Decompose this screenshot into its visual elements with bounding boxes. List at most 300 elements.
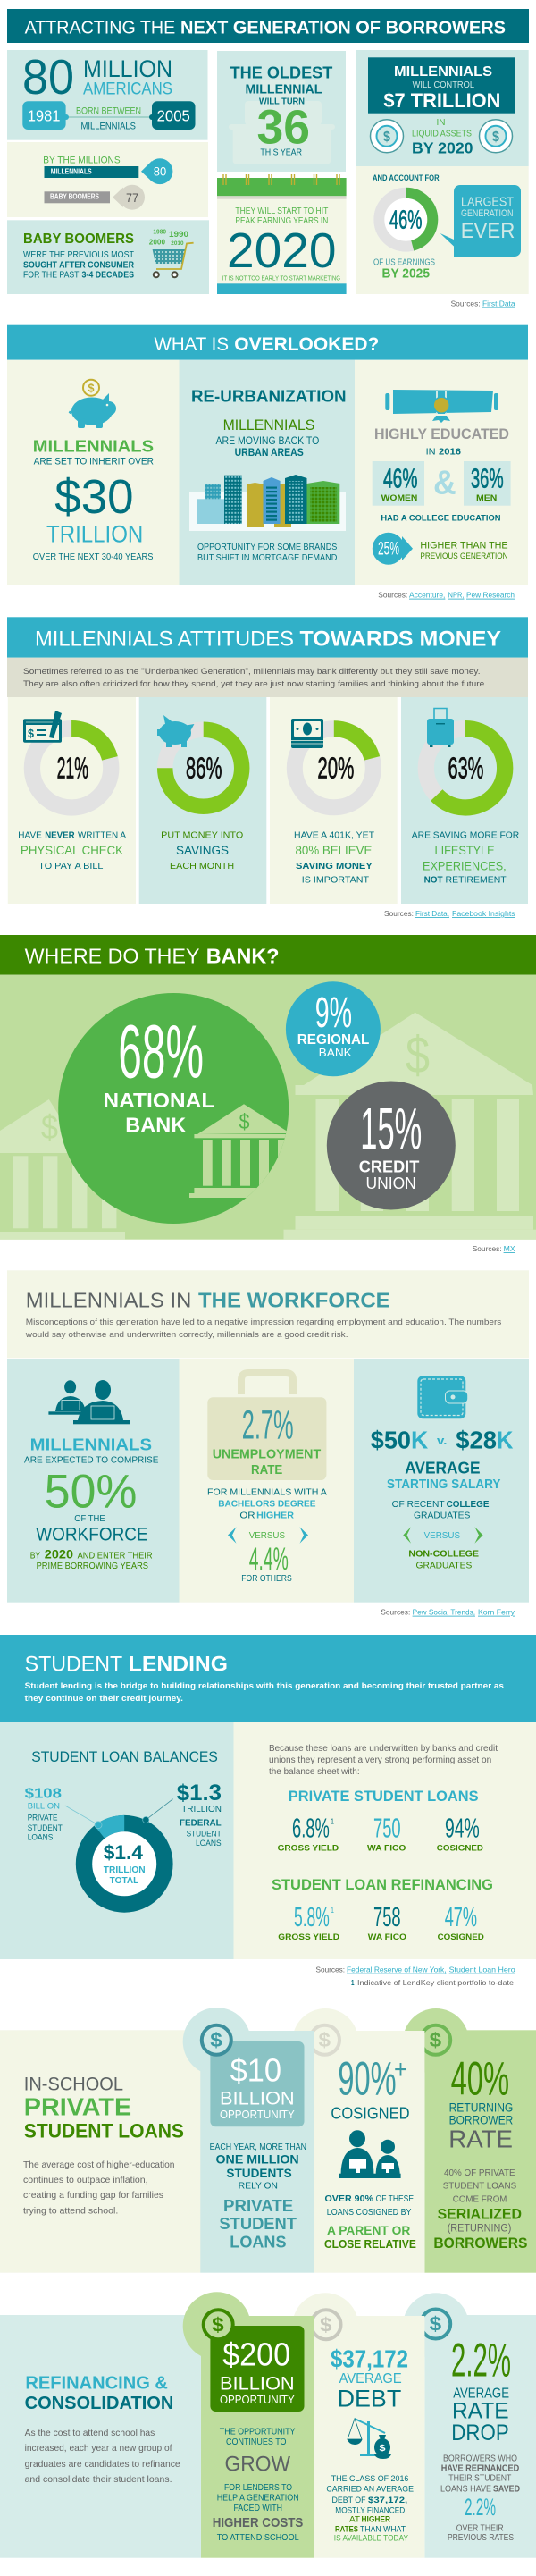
national bank circle (58, 993, 292, 1224)
source line and footnote: federal reserve student loan hero (316, 1966, 515, 1987)
panel: baby boomers: SOUGHT AFTER CONSUMER (23, 259, 134, 270)
panel: inherit $30 trillion: MILLENNIALS (33, 437, 154, 456)
panel: 80 million americans: AMERICANS (83, 80, 172, 98)
panel: $37,172 average debt: HIGHER (361, 2514, 390, 2524)
national bank circle: NATIONAL (103, 1089, 214, 1112)
icon: dollar coin: $ (210, 2029, 222, 2051)
callout box: $10 billion: $10 (230, 2051, 281, 2088)
heading: millennials in the workforce: MILLENNIALS IN (26, 1288, 191, 1311)
stats: private student loans: WA FICO (367, 1844, 406, 1854)
heading: student lending: Student lending is the bridge to building relationships with this generation and becoming their trusted partner as (25, 1681, 504, 1691)
panel: highly educated: HAD A COLLEGE EDUCATION (381, 514, 501, 524)
label: federal student loans: FEDERAL (180, 1818, 222, 1829)
panel: 2.2 percent average rate drop (403, 2293, 536, 2558)
panel: millennials will control $7 trillion: MILLENNIALS (394, 64, 492, 80)
panel: baby boomers: WERE THE PREVIOUS MOST (23, 249, 134, 260)
stats: private student loans: PRIVATE STUDENT LOANS (289, 1788, 479, 1805)
panel: highly educated: HIGHER THAN THE (420, 541, 508, 551)
source line: first data facebook insights: First Data, (415, 909, 449, 918)
panel: where do they bank chart (0, 975, 536, 1240)
stats: private student loans (278, 1788, 483, 1854)
panel: highly educated: HIGHLY EDUCATED (374, 425, 509, 442)
panel: lifestyle 63 percent: EXPERIENCES, (423, 859, 507, 873)
heading: millennials in the workforce: would say otherwise and underwritten correctly, millennials are a good credit risk. (25, 1330, 348, 1340)
label: federal student loans (177, 1780, 222, 1848)
source line: first data: First Data (482, 299, 515, 308)
label: federal student loans: $1.3 (177, 1780, 222, 1806)
panel: 2.7 percent unemployment: RATE (251, 1463, 283, 1477)
source line and footnote: federal reserve student loan hero: Federal Reserve of New York, (347, 1966, 447, 1974)
panel: $37,172 average debt: AT (349, 2514, 360, 2524)
icon: shopping cart with years: 2010 (171, 240, 184, 247)
icon: check and pen: $ (28, 727, 35, 740)
source line and footnote: federal reserve student loan hero: 1 (351, 1978, 355, 1987)
panel: $37,172 average debt: DEBT OF (332, 2496, 366, 2505)
panel: 2.7 percent unemployment: OR (239, 1511, 255, 1521)
panel: lifestyle 63 percent: LIFESTYLE (434, 843, 495, 857)
chart: 86 percent donut (165, 729, 242, 806)
source line and footnote: federal reserve student loan hero: Sources: (316, 1966, 345, 1974)
stats: student loan refinancing: STUDENT LOAN REFINANCING (272, 1876, 493, 1893)
panel: 50 percent of the workforce: WORKFORCE (36, 1525, 148, 1545)
callout: largest generation ever (440, 185, 521, 257)
credit union circle: CREDIT (359, 1158, 419, 1176)
panel: 2.7 percent unemployment: HIGHER (256, 1511, 294, 1521)
panel: highly educated: & (433, 464, 456, 501)
source line and footnote: federal reserve student loan hero: Student Loan Hero (449, 1966, 515, 1974)
label: private student loans: PRIVATE (28, 1814, 57, 1823)
panel: highly educated (355, 360, 528, 585)
panel: the oldest millennial (217, 51, 346, 172)
panel: millennials will control $7 trillion (356, 50, 529, 166)
panel: 401k 20 percent: 80% BELIEVE (295, 843, 372, 857)
chart: 63 percent donut (426, 728, 505, 808)
panel: $37,172 average debt: CARRIED AN AVERAGE (326, 2484, 414, 2494)
panel: 40 percent returning borrower rate: 40% OF PRIVATE (444, 2168, 515, 2178)
panel: refinancing and consolidation intro: CONSOLIDATION (25, 2393, 173, 2413)
callout box: $200 billion (210, 2326, 304, 2412)
panel: by the millions bar chart: 77 (126, 191, 138, 205)
panel: starting salary: K (497, 1427, 513, 1454)
panel: 80 million americans: 80 (22, 49, 74, 105)
panel: 2.2 percent average rate drop: RATE (452, 2398, 509, 2423)
panel: $200 billion opportunity: CONTINUES TO (226, 2437, 287, 2447)
panel: re-urbanization: URBAN AREAS (235, 448, 304, 459)
stats: student loan refinancing: 758 (373, 1901, 401, 1932)
panel: 50 percent of the workforce: ARE EXPECTED TO COMPRISE (24, 1455, 159, 1466)
panel: 50 percent of the workforce: 2020 (45, 1546, 73, 1561)
icon: 25 percent badge (373, 533, 413, 565)
source line: accenture npr pew (378, 591, 515, 600)
icon: scales with money bag: $ (379, 2444, 386, 2454)
icon: dollar coin: $ (212, 2313, 224, 2336)
panel: 2.2 percent average rate drop: HAVE REFINANCED (441, 2463, 519, 2473)
icon: shopping cart with years: 2000 (149, 238, 165, 247)
source line: first data facebook insights: Facebook Insights (452, 909, 515, 918)
icon: coin left (370, 120, 404, 153)
panel: $10 billion opportunity: RELY ON (239, 2181, 278, 2192)
panel: refinancing and consolidation intro: and consolidate their student loans. (25, 2474, 172, 2485)
panel: lifestyle 63 percent: RETIREMENT (445, 875, 507, 886)
panel: performing asset statistics: unions they represent a very strong performing asset on (269, 1755, 491, 1765)
heading: student lending (0, 1635, 536, 1722)
panel: starting salary: K (411, 1427, 428, 1454)
callout box: $10 billion (210, 2041, 304, 2126)
panel: $10 billion opportunity (183, 2008, 314, 2273)
panel: starting salary: NON-COLLEGE (408, 1549, 479, 1560)
regional bank circle: 9% (315, 989, 352, 1037)
panel: inherit $30 trillion: ARE SET TO INHERIT OVER (34, 457, 154, 467)
panel: 46 percent of earnings: OF US EARNINGS (373, 258, 435, 268)
panel: lifestyle 63 percent: NOT (424, 875, 443, 886)
source line: pew korn ferry (381, 1608, 515, 1617)
panel: inherit $30 trillion: $30 (54, 470, 133, 524)
panel: 50 percent of the workforce: AND ENTER THEIR (78, 1550, 153, 1561)
panel: 40 percent returning borrower rate: BORROWERS (433, 2235, 527, 2252)
icon: coin right (479, 120, 513, 153)
icon: versus chevrons (228, 1527, 308, 1544)
icon: check and pen (23, 711, 62, 743)
panel: lifestyle 63 percent: ARE SAVING MORE FOR (412, 830, 520, 841)
icon: piggy bank with coin: $ (88, 381, 95, 395)
panel: $37,172 average debt: RATES (335, 2524, 358, 2534)
panel: the oldest millennial: MILLENNIAL (245, 82, 322, 97)
callout box: $200 billion: BILLION (220, 2373, 295, 2394)
panel: refinancing and consolidation intro: graduates are candidates to refinance (25, 2459, 180, 2470)
panel: performing asset statistics: Because these loans are underwritten by banks and credit (269, 1744, 498, 1754)
panel: 50 percent of the workforce: 50% (45, 1466, 137, 1519)
callout: largest generation ever: LARGEST (461, 195, 514, 210)
panel: the oldest millennial: THIS YEAR (260, 147, 302, 157)
icon: dollar coin: $ (318, 2029, 331, 2051)
stats: private student loans: GROSS YIELD (278, 1844, 339, 1854)
callout box: $200 billion: $200 (222, 2336, 290, 2373)
panel: by the millions bar chart (7, 142, 208, 217)
panel: starting salary: AVERAGE (405, 1460, 481, 1477)
panel: in-school private student loans intro (0, 2030, 200, 2273)
panel: $37,172 average debt: $37,172, (368, 2496, 407, 2505)
panel: refinancing and consolidation intro: As the cost to attend school has (25, 2428, 155, 2438)
panel: re-urbanization: OPPORTUNITY FOR SOME BRANDS (197, 542, 337, 552)
panel: $10 billion opportunity: ONE MILLION (216, 2152, 299, 2167)
panel: 90 percent cosigned: OVER 90% (325, 2194, 373, 2204)
chart: loan balance donut: $1.4 (104, 1841, 143, 1864)
source line: mx: MX (504, 1244, 515, 1253)
panel: re-urbanization: BUT SHIFT IN MORTGAGE DEMAND (197, 552, 338, 563)
panel: 40 percent returning borrower rate: STUDENT LOANS (443, 2181, 517, 2191)
panel: 80 million americans: MILLENNIALS (80, 121, 136, 131)
panel: 50 percent of the workforce (7, 1359, 179, 1603)
panel: highly educated: IN (426, 447, 436, 458)
chart: loan balance donut: TRILLION (104, 1865, 146, 1875)
stats: private student loans: 94% (445, 1813, 480, 1844)
panel: 2.2 percent average rate drop: BORROWERS WHO (443, 2454, 517, 2463)
panel: refinancing and consolidation intro: increased, each year a new group of (25, 2443, 172, 2454)
panel: 50 percent of the workforce: MILLENNIALS (30, 1435, 152, 1453)
heading: student lending: LENDING (129, 1652, 228, 1676)
panel: 2.7 percent unemployment: 4.4% (249, 1542, 289, 1577)
icon: shopping cart with years (149, 230, 194, 277)
panel: 2.7 percent unemployment (179, 1359, 354, 1603)
panel: 2.2 percent average rate drop: THEIR STUDENT (448, 2474, 511, 2484)
title: attracting the next generation: ATTRACTING THE (25, 18, 175, 38)
panel: $200 billion opportunity: THE OPPORTUNITY (220, 2427, 296, 2437)
panel: $200 billion opportunity: FACED WITH (234, 2504, 282, 2513)
stats: student loan refinancing: COSIGNED (438, 1932, 484, 1942)
panel: student loan balances (0, 1722, 234, 1959)
icon: birthday cake (229, 80, 335, 164)
title: attracting the next generation: NEXT GENERATION OF BORROWERS (180, 18, 506, 38)
panel: 46 percent of earnings: AND ACCOUNT FOR (373, 173, 440, 182)
national bank circle: BANK (125, 1114, 187, 1137)
national bank circle: $ (239, 1110, 250, 1134)
chart: 21 percent donut: 21% (57, 751, 88, 784)
icon: calendar rings (223, 174, 339, 185)
panel: 40 percent returning borrower rate: RATE (448, 2125, 513, 2152)
panel: $10 billion opportunity: STUDENT (219, 2214, 297, 2233)
panel: 80 million americans: 1981 (28, 106, 61, 124)
panel: $37,172 average debt: DEBT (338, 2386, 401, 2412)
stats: private student loans: 6.8% (292, 1813, 330, 1844)
icon: large bank background (284, 1013, 536, 1240)
panel: in-school private student loans intro: STUDENT LOANS (24, 2120, 184, 2142)
icon: briefcase (207, 1373, 326, 1480)
panel: $200 billion opportunity: HELP A GENERATION (217, 2493, 299, 2503)
stats: private student loans: 750 (373, 1813, 401, 1844)
panel: re-urbanization: MILLENNIALS (223, 417, 314, 434)
panel: physical check 21 percent: WRITTEN A (78, 830, 126, 841)
panel: starting salary: v. (437, 1434, 447, 1447)
panel: 2.7 percent unemployment: FOR MILLENNIALS WITH A (207, 1487, 327, 1498)
panel: 40 percent returning borrower rate (403, 2008, 536, 2273)
panel: millennials will control $7 trillion: $7 TRILLION (383, 89, 500, 112)
panel: millennials will control $7 trillion: BY 2020 (412, 139, 473, 157)
panel: 2.2 percent average rate drop: LOANS HAVE (440, 2484, 491, 2494)
source line: first data (451, 299, 515, 308)
panel: 80 million americans: 2005 (157, 106, 190, 124)
panel: 2.2 percent average rate drop: 2.2% (465, 2494, 496, 2521)
stats: private student loans: COSIGNED (437, 1844, 483, 1854)
source line: mx: Sources: (473, 1244, 502, 1253)
label: private student loans: LOANS (28, 1833, 53, 1843)
panel: millennials will control $7 trillion: LIQUID ASSETS (412, 128, 472, 139)
panel: highly educated: WOMEN (381, 493, 418, 503)
stats: student loan refinancing: GROSS YIELD (278, 1932, 339, 1942)
panel: 90 percent cosigned: OF THESE (376, 2194, 414, 2204)
icon: city skyline (189, 475, 346, 531)
panel: inherit $30 trillion (7, 360, 179, 585)
panel: by the millions bar chart: BABY BOOMERS (50, 193, 100, 201)
panel: lifestyle 63 percent (401, 697, 528, 904)
icon: versus chevrons (403, 1527, 483, 1544)
chart: 46 percent donut (373, 188, 438, 252)
panel: inherit $30 trillion: TRILLION (46, 521, 143, 548)
panel: refinancing and consolidation intro (0, 2315, 201, 2558)
callout box: $200 billion: OPPORTUNITY (220, 2394, 295, 2406)
icon: coin left: $ (383, 130, 390, 145)
panel: 40 percent returning borrower rate: (RETURNING) (448, 2224, 512, 2235)
icon: dollar coin (421, 2310, 450, 2338)
panel: millennials will control $7 trillion: IN (436, 118, 445, 128)
panel: 40 percent returning borrower rate: RETURNING (449, 2101, 513, 2115)
panel: starting salary: VERSUS (424, 1531, 460, 1541)
panel: highly educated: 36% (471, 463, 504, 494)
panel: $200 billion opportunity: HIGHER COSTS (213, 2515, 303, 2530)
panel: 401k 20 percent: HAVE A 401K, YET (294, 830, 375, 841)
panel: starting salary (354, 1359, 529, 1603)
icon: dollar coin (310, 2025, 339, 2055)
icon: dollar coin (421, 2025, 450, 2055)
chart: 86 percent donut: 86% (186, 751, 222, 784)
credit union circle (327, 1082, 456, 1210)
heading: student lending: they continue on their credit journey. (25, 1694, 183, 1704)
panel: physical check 21 percent: PHYSICAL CHECK (21, 843, 124, 857)
panel: $37,172 average debt: THE CLASS OF 2016 (331, 2474, 408, 2484)
callout box: $10 billion: OPPORTUNITY (220, 2109, 295, 2121)
source line: accenture npr pew: Sources: (378, 591, 407, 600)
text block: underbanked generation intro: They are also often criticized for how they spend, yet they are just now starting families and thinking about the future. (23, 679, 487, 689)
panel: the oldest millennial: THE OLDEST (230, 63, 333, 81)
callout: largest generation ever: EVER (461, 219, 515, 243)
panel: in-school private student loans intro: IN-SCHOOL (24, 2074, 123, 2094)
panel: $10 billion opportunity: LOANS (230, 2233, 286, 2252)
panel: highly educated: 2016 (439, 447, 461, 458)
panel: baby boomers: 3-4 DECADES (82, 270, 134, 281)
panel: starting salary: $28 (456, 1427, 497, 1454)
panel: by the millions bar chart: MILLENNIALS (51, 168, 92, 176)
label: federal student loans: LOANS (196, 1839, 222, 1848)
icon: dollar coin (202, 2025, 231, 2055)
chart: loan balance donut: TOTAL (110, 1876, 138, 1886)
panel: in-school private student loans intro: trying to attend school. (23, 2206, 118, 2217)
chart: 21 percent donut (32, 728, 111, 808)
panel: starting salary: COLLEGE (447, 1499, 490, 1510)
panel: 90 percent cosigned: 90% (338, 2052, 397, 2105)
credit union circle: 15% (360, 1096, 422, 1162)
panel: starting salary: GRADUATES (416, 1561, 472, 1571)
callout box: $10 billion: BILLION (220, 2088, 295, 2109)
label: federal student loans: STUDENT (187, 1829, 222, 1839)
heading: millennials in the workforce: THE WORKFORCE (198, 1288, 390, 1311)
source line: accenture npr pew: Pew Research (466, 591, 515, 600)
chart: 46 percent donut: 46% (389, 206, 422, 235)
icon: coin right: $ (492, 130, 499, 145)
panel: refinancing and consolidation intro: REFINANCING & (25, 2373, 168, 2394)
source line: accenture npr pew: Accenture, (409, 591, 445, 600)
panel: 401k 20 percent (270, 697, 398, 904)
panel: in-school private student loans intro: The average cost of higher-education (23, 2159, 175, 2170)
panel: 2.7 percent unemployment: VERSUS (249, 1531, 285, 1541)
panel: 46 percent of earnings: BY 2025 (382, 267, 430, 282)
panel: $200 billion opportunity: TO ATTEND SCHOOL (217, 2533, 299, 2543)
label: private student loans: $108 (25, 1787, 62, 1802)
title: attracting the next generation (7, 9, 529, 43)
panel: student loan balances: STUDENT LOAN BALANCES (31, 1748, 218, 1765)
chart: 20 percent donut (295, 728, 373, 807)
panel: highly educated: MEN (476, 493, 497, 503)
icon: people at laptops (48, 1380, 130, 1424)
panel: performing asset statistics (234, 1722, 536, 1959)
label: private student loans: STUDENT (28, 1823, 63, 1833)
heading: millennials in the workforce (7, 1270, 529, 1358)
panel: 50 percent of the workforce: OF THE (74, 1514, 105, 1524)
panel: baby boomers: FOR THE PAST (23, 270, 80, 281)
panel: savings 86 percent: EACH MONTH (170, 861, 234, 871)
panel: calendar 2020: PEAK EARNING YEARS IN (235, 215, 328, 226)
panel: starting salary: STARTING SALARY (387, 1477, 500, 1492)
heading: millennials attitudes towards money: TOWARDS MONEY (300, 627, 501, 651)
panel: in-school private student loans intro: continues to outpace inflation, (23, 2175, 148, 2185)
label: private student loans (25, 1787, 63, 1843)
panel: 2.2 percent average rate drop: DROP (451, 2420, 509, 2446)
panel: calendar 2020: 2020 (227, 223, 336, 278)
panel: the oldest millennial: WILL TURN (259, 97, 305, 106)
source line: pew korn ferry: Korn Ferry (478, 1608, 515, 1617)
panel: by the millions bar chart: 80 (154, 165, 166, 179)
icon: dollar coin: $ (430, 2029, 441, 2051)
stats: student loan refinancing: 1 (331, 1907, 334, 1915)
panel: 80 million americans: BORN BETWEEN (76, 106, 141, 117)
panel: 90 percent cosigned: + (394, 2055, 407, 2084)
icon: shopping cart with years: 1990 (169, 230, 188, 240)
panel: calendar 2020 (217, 174, 347, 294)
regional bank circle (286, 981, 381, 1076)
panel: $200 billion opportunity (183, 2292, 314, 2558)
panel: 401k 20 percent: SAVING MONEY (296, 861, 373, 871)
heading: millennials attitudes towards money: MILLENNIALS ATTITUDES (35, 627, 294, 651)
icon: diploma (385, 390, 498, 423)
panel: 2.2 percent average rate drop: SAVED (493, 2484, 520, 2494)
source line: pew korn ferry: Sources: (381, 1608, 410, 1617)
label: private student loans: BILLION (28, 1801, 60, 1811)
source line and footnote: federal reserve student loan hero: Indicative of LendKey client portfolio to-date (357, 1978, 514, 1987)
national bank circle: 68% (118, 1010, 204, 1094)
stats: student loan refinancing: WA FICO (368, 1932, 406, 1942)
panel: in-school private student loans intro: creating a funding gap for families (23, 2190, 163, 2201)
panel: 40 percent returning borrower rate: COME FROM (453, 2194, 507, 2204)
stats: student loan refinancing: 47% (445, 1901, 477, 1932)
panel: 40 percent returning borrower rate: SERIALIZED (438, 2205, 522, 2222)
icon: parent and child at screens (339, 2130, 401, 2178)
panel: savings 86 percent: SAVINGS (176, 843, 229, 857)
heading: where do they bank: WHERE DO THEY (25, 944, 200, 967)
panel: 80 million americans: MILLION (83, 55, 172, 82)
panel: baby boomers: BABY BOOMERS (23, 232, 134, 247)
icon: suitcase (427, 708, 454, 747)
icon: dollar coin: $ (430, 2313, 441, 2336)
icon: small bank background (0, 1099, 125, 1240)
panel: 46 percent of earnings (356, 166, 529, 294)
panel: 2.2 percent average rate drop: OVER THEIR (456, 2524, 504, 2534)
panel: $37,172 average debt: $37,172 (331, 2344, 408, 2372)
panel: re-urbanization (179, 360, 355, 585)
icon: 25 percent badge: 25% (378, 539, 399, 560)
panel: 2.7 percent unemployment: UNEMPLOYMENT (213, 1447, 321, 1461)
source line: first data: Sources: (451, 299, 481, 308)
panel: physical check 21 percent: HAVE (18, 830, 42, 841)
panel: 2.7 percent unemployment: FOR OTHERS (241, 1574, 292, 1584)
panel: baby boomers (7, 220, 209, 294)
credit union circle: UNION (366, 1174, 416, 1192)
panel: savings 86 percent: PUT MONEY INTO (161, 830, 243, 841)
heading: where do they bank (0, 935, 536, 975)
icon: small bank background: $ (41, 1109, 58, 1147)
panel: highly educated: 46% (383, 463, 417, 494)
heading: what is overlooked: OVERLOOKED? (234, 334, 379, 355)
chart: 63 percent donut: 63% (448, 751, 483, 784)
panel: the oldest millennial: 36 (257, 101, 310, 155)
panel: re-urbanization: RE-URBANIZATION (191, 387, 347, 406)
